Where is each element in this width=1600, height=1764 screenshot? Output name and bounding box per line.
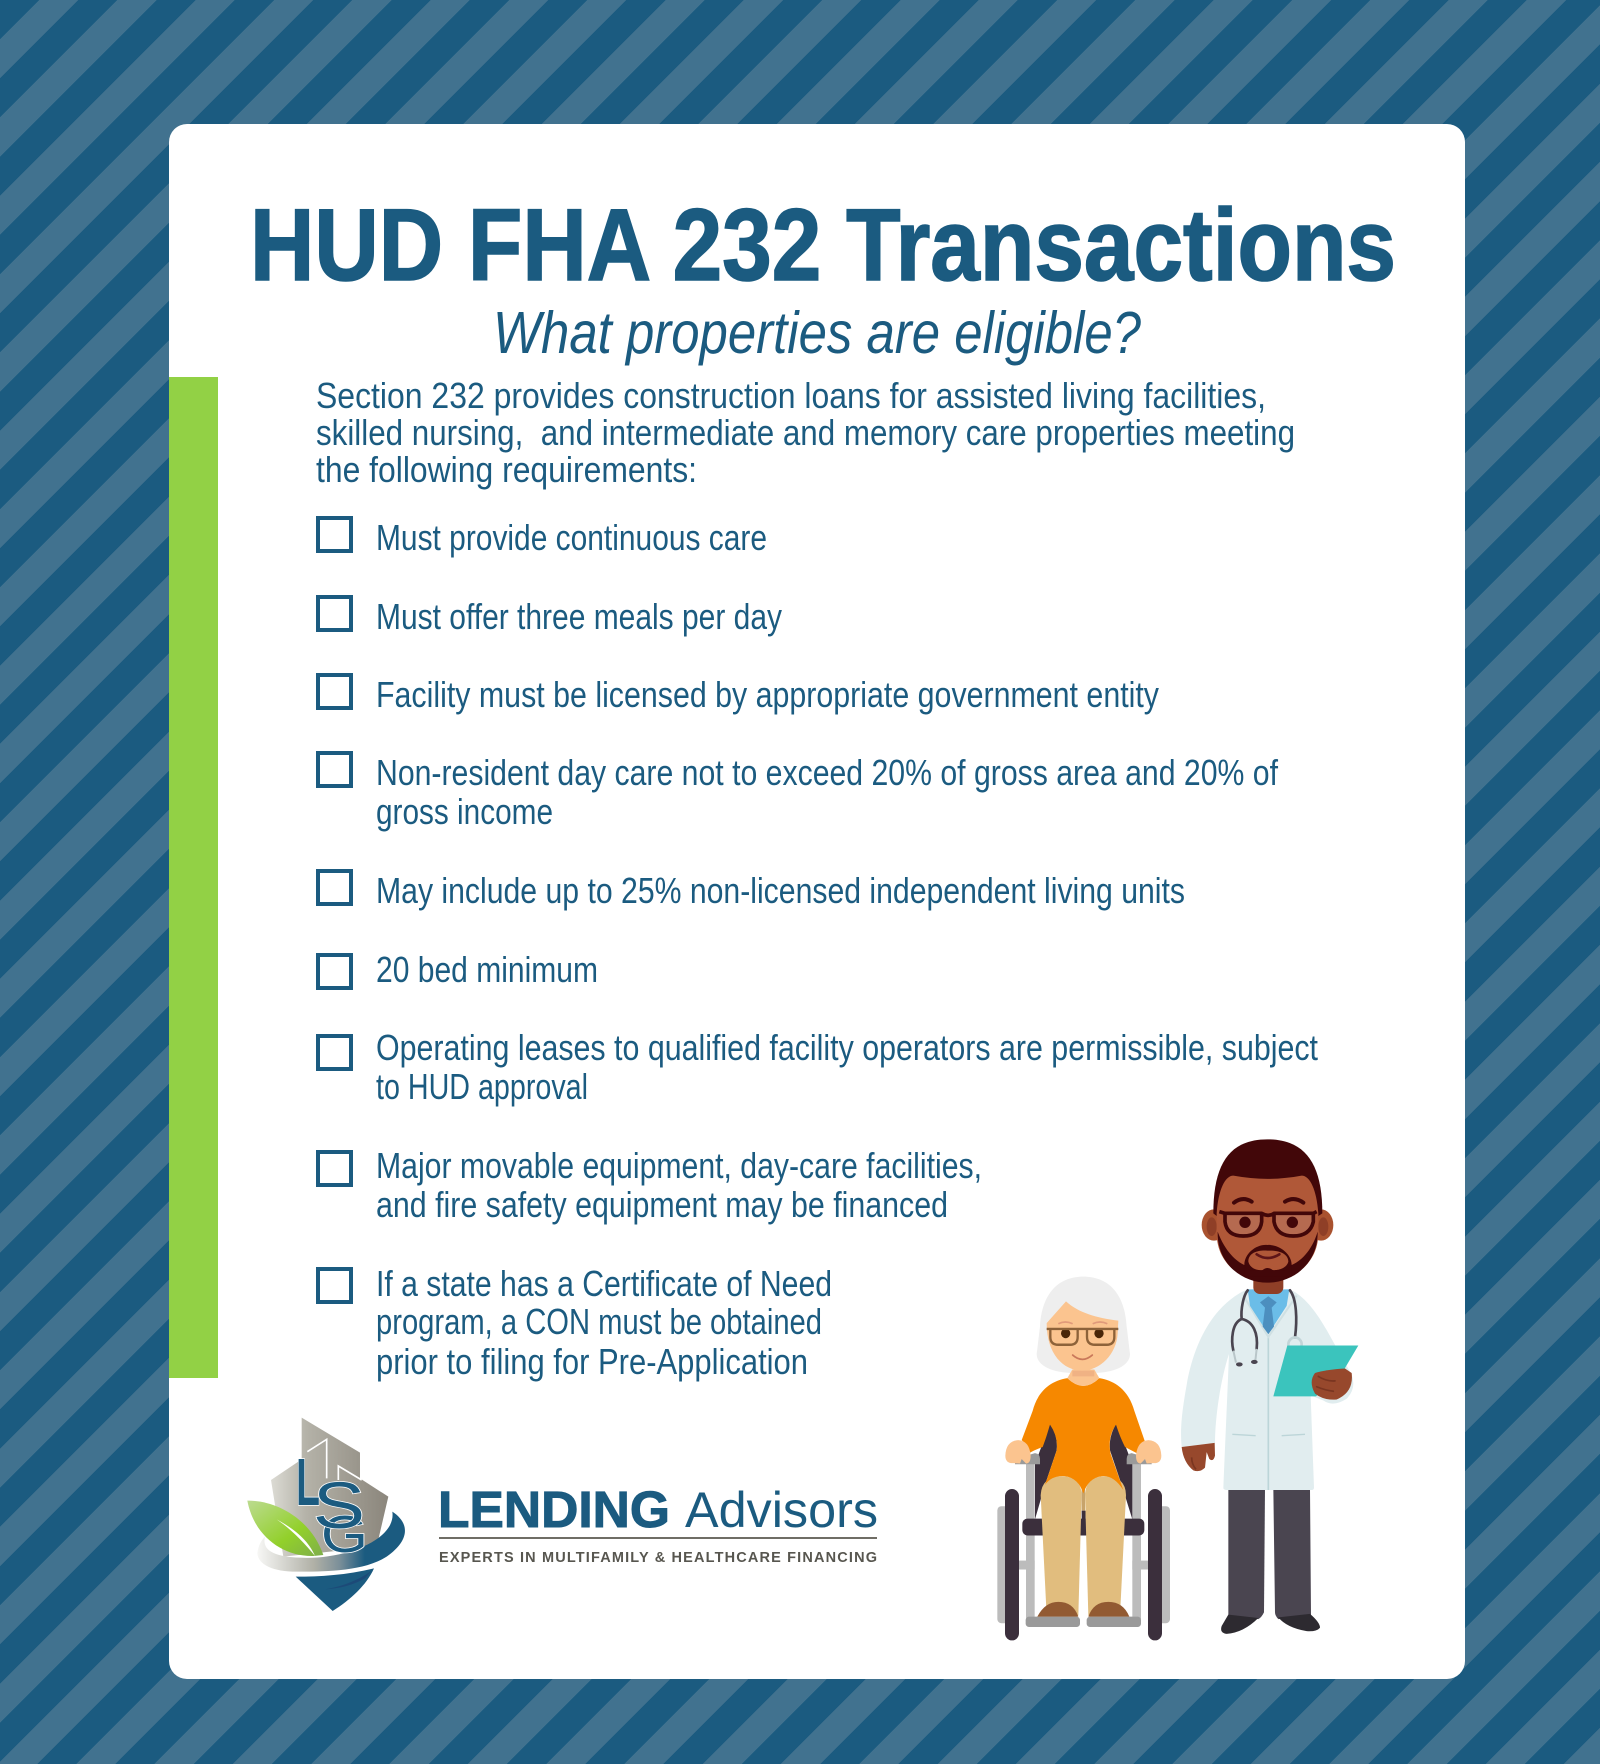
title: HUD FHA 232 Transactions — [250, 188, 1396, 302]
checklist item: certificate of need: If a state has a Certificate of Need — [376, 1263, 832, 1304]
checklist item: non-resident day care — [318, 752, 1279, 832]
panel: white card — [169, 124, 1465, 1679]
logo: LSG shield emblem — [247, 1418, 405, 1611]
logo: wordmark — [438, 1481, 878, 1566]
checklist item: 20 bed minimum: 20 bed minimum — [376, 949, 598, 990]
checklist item: independent living units: May include up to 25% non-licensed independent living units — [376, 870, 1185, 911]
intro paragraph: the following requirements: — [316, 449, 697, 490]
logo: wordmark: LENDING — [438, 1481, 670, 1538]
checklist item: operating leases — [318, 1027, 1318, 1107]
checklist item: licensed: Facility must be licensed by appropriate government entity — [376, 674, 1159, 715]
logo: LSG shield emblem: S — [313, 1468, 365, 1542]
illustration: woman in wheelchair — [997, 1277, 1170, 1640]
checklist item: certificate of need: program, a CON must be obtained — [376, 1301, 822, 1342]
logo: LSG shield emblem: L — [296, 1445, 320, 1520]
green accent bar — [169, 377, 218, 1378]
checklist item: 20 bed minimum — [318, 949, 598, 990]
logo: LSG shield emblem: G — [321, 1506, 368, 1564]
checklist item: certificate of need — [318, 1263, 832, 1382]
checklist item: certificate of need: prior to filing for Pre-Application — [376, 1341, 808, 1382]
logo: wordmark: EXPERTS IN MULTIFAMILY & HEALTHCARE FINANCING — [439, 1550, 877, 1566]
checklist item: non-resident day care: Non-resident day care not to exceed 20% of gross area and 20% of — [376, 752, 1279, 793]
logo: wordmark: Advisors — [685, 1482, 878, 1538]
intro paragraph: skilled nursing, and intermediate and memory care properties meeting — [316, 412, 1295, 453]
checklist item: movable equipment: and fire safety equipment may be financed — [376, 1184, 948, 1225]
checklist item: continuous care: Must provide continuous care — [376, 517, 767, 558]
intro paragraph — [316, 375, 1295, 490]
intro paragraph: Section 232 provides construction loans for assisted living facilities, — [316, 375, 1266, 416]
illustration: doctor — [1181, 1139, 1358, 1634]
subtitle: What properties are eligible? — [493, 300, 1141, 366]
checklist item: operating leases: Operating leases to qualified facility operators are permissible, subject — [376, 1027, 1318, 1068]
checklist item: non-resident day care: gross income — [376, 791, 553, 832]
checklist item: movable equipment — [318, 1145, 982, 1225]
checklist item: movable equipment: Major movable equipment, day-care facilities, — [376, 1145, 982, 1186]
checklist item: three meals: Must offer three meals per day — [376, 596, 782, 637]
checklist item: operating leases: to HUD approval — [376, 1066, 588, 1107]
